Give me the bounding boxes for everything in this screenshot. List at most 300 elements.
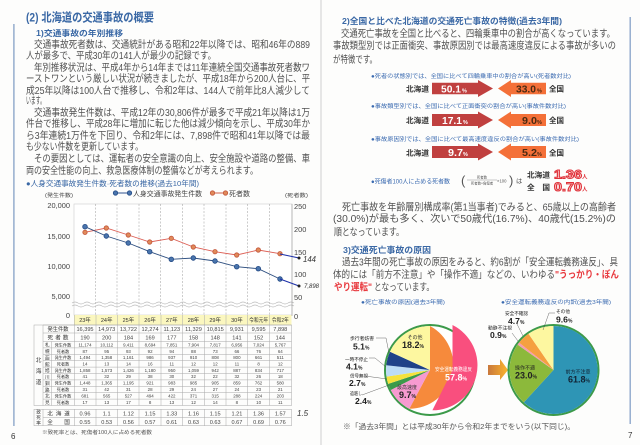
pie chart: causes of fatal accidents bbox=[385, 325, 477, 415]
comparison 3: accident cause: % bbox=[537, 152, 542, 158]
page number 7: 7 bbox=[628, 431, 633, 440]
table values: 14 bbox=[83, 362, 88, 366]
table values: 0.57 bbox=[145, 420, 156, 426]
table values: 0.63 bbox=[210, 420, 221, 426]
row labels: 川 bbox=[45, 374, 50, 380]
row labels: 死者数 bbox=[57, 399, 70, 406]
table values: 184 bbox=[124, 336, 133, 342]
comparison 1: occupants bbox=[371, 72, 571, 97]
comparison 4: fatality rate: ) bbox=[509, 173, 513, 188]
pie labels: breakdown callouts: 0.9% bbox=[490, 330, 507, 340]
table values: 800 bbox=[233, 355, 241, 360]
year header row: 26年 bbox=[144, 316, 156, 324]
row labels: 率 bbox=[36, 420, 41, 426]
text block: causes: 体的には「前方不注意」や「操作不適」などの、いわゆる bbox=[333, 268, 555, 281]
table values: 30 bbox=[169, 374, 175, 379]
table values: 190 bbox=[80, 336, 90, 342]
text block: age composition: (30.0%)が最も多く、次いで50歳代(16.7%)、40歳代(15.2%)の bbox=[333, 212, 616, 225]
pie labels: left side callouts: 2.7% bbox=[349, 378, 366, 388]
handwritten extensions bbox=[280, 254, 319, 290]
table values: 887 bbox=[233, 368, 241, 373]
pie labels: breakdown callouts bbox=[488, 308, 573, 341]
comparison 1: occupants: 33.0 bbox=[516, 84, 536, 96]
table values: 422 bbox=[168, 394, 176, 398]
arrow between pies bbox=[488, 359, 508, 380]
table values: 141 bbox=[232, 336, 242, 342]
row labels: 死者数 bbox=[57, 360, 70, 368]
right axis labels: 50 bbox=[294, 293, 302, 302]
text block: comparison intro bbox=[333, 27, 616, 66]
table values: 1,858 bbox=[80, 368, 91, 373]
pie chart: causes of fatal accidents: 安全運転義務違反 bbox=[435, 365, 472, 373]
text block: left page body: その要因としては、運転者の安全意識の向上、安全施設や道路の整備、車 bbox=[34, 152, 310, 165]
legend: 人身交通事故発生件数 bbox=[133, 189, 202, 198]
left axis labels: 5,000 bbox=[52, 292, 70, 301]
year header row: 27年 bbox=[166, 316, 178, 324]
table values: 11,329 bbox=[185, 327, 202, 333]
table values: 200 bbox=[102, 336, 111, 342]
left axis labels: 0 bbox=[66, 311, 70, 320]
table values: 1.12 bbox=[123, 412, 134, 418]
row labels: 死者数 bbox=[48, 334, 69, 342]
comparison 1: occupants: % bbox=[537, 88, 542, 94]
comparison 3: accident cause bbox=[371, 135, 579, 160]
comparison 4: fatality rate: 人 bbox=[582, 174, 588, 180]
table values: 986 bbox=[146, 355, 154, 360]
pie caption: causes: ●死亡事故の原因(過去3年間) bbox=[361, 298, 445, 306]
table values: 12 bbox=[278, 362, 283, 366]
table values: 14 bbox=[213, 400, 218, 405]
table values: 66 bbox=[234, 349, 240, 354]
pie chart: causes of fatal accidents: 9.7% bbox=[399, 390, 417, 400]
row labels: 海 bbox=[36, 367, 42, 375]
table values: 0.69 bbox=[253, 420, 264, 426]
table values: 11,174 bbox=[78, 342, 92, 348]
comparison 2: accident type: % bbox=[537, 120, 542, 126]
table values: 169 bbox=[145, 336, 155, 342]
row labels: 死者数 bbox=[57, 373, 70, 380]
year header row: 令和2年 bbox=[272, 316, 289, 324]
table values: 18 bbox=[278, 374, 283, 379]
table values: 7,898 bbox=[273, 327, 287, 333]
table values: 10,815 bbox=[207, 327, 224, 333]
comparison 2: accident type: % bbox=[463, 120, 468, 126]
table values: 92 bbox=[148, 349, 153, 354]
pie labels: left side callouts: 2.4% bbox=[355, 396, 372, 406]
table values: 1.16 bbox=[188, 412, 199, 418]
comparison 2: accident type: ●事故類型別では、全国に比べて正面衝突の割合が高い(事故件数対比) bbox=[371, 102, 566, 110]
row labels: 館 bbox=[45, 361, 50, 368]
left axis labels: 15,000 bbox=[47, 232, 70, 241]
table values: 12 bbox=[191, 362, 196, 366]
comparison 4: fatality rate: 死者数+負傷者 bbox=[471, 180, 494, 186]
left axis labels: 20,000 bbox=[47, 201, 70, 210]
axis titles: (死者数) bbox=[285, 192, 308, 199]
table values: 24 bbox=[234, 387, 240, 392]
table values: 950 bbox=[168, 368, 176, 373]
row labels: 札 bbox=[45, 342, 50, 348]
text block: left page body: 交通事故発生件数は、平成12年の30,806件が最多で平成21年以降は1万 bbox=[34, 106, 310, 119]
table values: 494 bbox=[146, 394, 154, 398]
table values: 16 bbox=[148, 362, 153, 366]
text block: left page body: 件台で推移し、平成28年に増加に転じた他は減少傾向を示し、平成30年か bbox=[26, 117, 310, 130]
comparison 4: fatality rate: ●死傷者100人に占める死者数 bbox=[371, 178, 450, 186]
line chart: accidents and deaths bbox=[45, 189, 319, 321]
pie chart: causes of fatal accidents: その他 bbox=[407, 334, 423, 341]
table values: 32 bbox=[191, 374, 196, 379]
comparison 2: accident type: 9.0 bbox=[522, 116, 537, 127]
table values: 14 bbox=[126, 362, 131, 366]
table values: 371 bbox=[190, 394, 198, 398]
text block: left page body: 成25年以降は100人台で推移し、令和2年は、144人で前年比8人減少して bbox=[26, 84, 310, 97]
table values: 681 bbox=[81, 394, 89, 398]
year header row: 30年 bbox=[231, 316, 243, 324]
pie caption: breakdown: ●安全運転義務違反の内訳(過去3年間) bbox=[501, 298, 611, 306]
comparison 1: occupants: 全国 bbox=[549, 84, 564, 94]
table values: 1,448 bbox=[80, 380, 91, 386]
table values: 905 bbox=[212, 380, 219, 386]
handwritten extensions: 7,898 bbox=[304, 283, 319, 290]
table values: 288 bbox=[233, 394, 241, 398]
comparison 2: accident type bbox=[371, 102, 566, 128]
comparison 3: accident cause: % bbox=[463, 152, 468, 158]
row labels: 函 bbox=[45, 356, 50, 362]
comparison 3: accident cause: 全国 bbox=[549, 148, 564, 158]
table values: 0.61 bbox=[166, 420, 177, 426]
table values: 7,904 bbox=[188, 342, 200, 348]
pie labels: breakdown callouts: 4.7% bbox=[508, 316, 525, 326]
table values: 12 bbox=[213, 362, 218, 366]
table values: 0.67 bbox=[231, 420, 242, 426]
table values: 93 bbox=[126, 349, 131, 354]
table values: 32 bbox=[104, 374, 110, 379]
table values: 1.1 bbox=[103, 412, 111, 418]
table values: 152 bbox=[254, 336, 263, 342]
year header row: 28年 bbox=[188, 316, 200, 324]
comparison 4: fatality rate: 人 bbox=[582, 187, 588, 193]
row labels: 北 bbox=[36, 356, 42, 364]
table values: 1,059 bbox=[188, 368, 200, 373]
table values: 16,395 bbox=[76, 327, 94, 333]
pie labels: left side callouts: 歩行者妨害 bbox=[350, 335, 374, 342]
text block: left page body: ーストワンという厳しい状況が続きましたが、平成18年から200人台に、平 bbox=[26, 72, 310, 85]
text block: age composition bbox=[333, 200, 616, 238]
axis titles bbox=[45, 192, 308, 199]
table values: 87 bbox=[83, 349, 88, 354]
table values: 565 bbox=[103, 394, 111, 398]
pie chart: breakdown of safe driving violations: 前方不注意 bbox=[565, 368, 591, 376]
comparison 4: fatality rate: 0.70 bbox=[554, 180, 582, 194]
row labels: 国 bbox=[64, 419, 70, 426]
table values: 7,024 bbox=[253, 342, 265, 348]
text block: causes: やり運転" bbox=[334, 280, 372, 294]
right axis labels: 200 bbox=[294, 225, 306, 234]
comparison 4: fatality rate: は bbox=[516, 178, 522, 186]
chart axes and gridlines bbox=[72, 204, 294, 316]
comparison 4: fatality rate: 北海道 bbox=[527, 170, 551, 180]
comparison 4: fatality rate: 死者数 bbox=[477, 174, 488, 180]
pie labels: breakdown callouts: 9.6% bbox=[556, 314, 573, 324]
table values: 8,694 bbox=[145, 342, 156, 348]
table values: 41 bbox=[83, 374, 88, 379]
table footnote: ※致死率とは、死傷者100人に占める死者数 bbox=[42, 428, 153, 436]
table values: 11 bbox=[170, 362, 175, 366]
table values: 580 bbox=[277, 380, 285, 386]
table values: 1,494 bbox=[80, 355, 91, 360]
pie labels: breakdown callouts: 安全不確認 bbox=[505, 310, 528, 317]
comparison 3: accident cause: 北海道 bbox=[406, 148, 430, 158]
row labels: 旭 bbox=[45, 367, 50, 374]
comparison 4: fatality rate: 1.36 bbox=[554, 168, 582, 182]
table values: 12 bbox=[191, 400, 196, 405]
table values: 315 bbox=[212, 394, 219, 398]
pie labels: left side callouts bbox=[345, 335, 389, 406]
table values: 1.36 bbox=[253, 412, 264, 418]
text block: left page body: 交通事故死者数は、交通統計がある昭和22年以降では、昭和46年の889 bbox=[34, 38, 310, 51]
table values: 7,817 bbox=[210, 342, 221, 348]
row labels: 死者数 bbox=[57, 386, 70, 393]
table values: 17 bbox=[126, 400, 131, 405]
table values: 0.96 bbox=[80, 412, 90, 418]
pie labels: left side callouts: 4.1% bbox=[346, 362, 363, 372]
row labels: 道 bbox=[36, 378, 42, 386]
text block: causes: となっています。 bbox=[374, 282, 434, 294]
pie chart: breakdown of safe driving violations bbox=[508, 325, 598, 415]
table values: 31 bbox=[83, 387, 88, 392]
table values: 1,195 bbox=[123, 380, 134, 386]
table values: 177 bbox=[167, 336, 176, 342]
left axis labels: 10,000 bbox=[47, 262, 70, 271]
row labels: 発生件数 bbox=[48, 325, 69, 333]
year header row: 25年 bbox=[123, 316, 135, 324]
table values: 13 bbox=[104, 400, 110, 405]
table values: 13 bbox=[169, 400, 175, 405]
table values: 38 bbox=[148, 374, 153, 379]
table values: 5,767 bbox=[275, 342, 286, 348]
comparison 2: accident type: 北海道 bbox=[406, 116, 430, 125]
table values: 224 bbox=[255, 394, 263, 398]
table values: 527 bbox=[125, 394, 133, 398]
table values: 1,358 bbox=[101, 355, 113, 360]
table values: 808 bbox=[212, 355, 219, 360]
table values: 1.57 bbox=[275, 412, 286, 418]
table values: 511 bbox=[277, 355, 284, 360]
row labels: 北 bbox=[45, 392, 50, 400]
table values: 73 bbox=[213, 349, 218, 354]
table values: 29 bbox=[169, 387, 175, 392]
pie labels: left side callouts: 5.1% bbox=[353, 342, 370, 352]
table values: 1.21 bbox=[231, 412, 242, 418]
comparison 3: accident cause: 5.2 bbox=[522, 148, 537, 159]
table values: 11,123 bbox=[163, 327, 180, 333]
table values: 937 bbox=[168, 355, 176, 360]
table values: 144 bbox=[276, 336, 285, 342]
pie labels: left side callouts: 追越し bbox=[350, 390, 362, 397]
table values: 985 bbox=[190, 380, 198, 386]
table values: 76 bbox=[256, 349, 262, 354]
comparison 4: fatality rate: 全 国 bbox=[527, 183, 550, 192]
right axis labels: 0 bbox=[294, 312, 298, 321]
row labels: 釧 bbox=[45, 380, 50, 387]
table values: 94 bbox=[169, 349, 175, 354]
table values: 0.56 bbox=[123, 420, 134, 426]
table values: 1.33 bbox=[166, 412, 177, 418]
text block: comparison intro: が特徴です。 bbox=[333, 53, 377, 66]
row labels: 発生件数 bbox=[55, 342, 72, 348]
heading: 1) yearly trend: 1)交通事故の年別推移 bbox=[36, 28, 123, 38]
table values: 11 bbox=[278, 400, 283, 405]
year header row: 29年 bbox=[209, 316, 222, 324]
comparison 1: occupants: ●死者の状態別では、全国に比べて四輪乗車中の割合が高い(死者数対比) bbox=[371, 72, 571, 80]
table values: 1,365 bbox=[101, 380, 113, 386]
page number 6: 6 bbox=[11, 432, 16, 441]
comparison 1: occupants: 北海道 bbox=[406, 84, 430, 94]
table values: 42 bbox=[104, 387, 110, 392]
table values: 95 bbox=[104, 349, 110, 354]
axis titles: (発生件数) bbox=[45, 192, 73, 199]
year header row: 23年 bbox=[79, 316, 91, 324]
comparison 2: accident type: 全国 bbox=[549, 116, 564, 125]
table values: 942 bbox=[212, 368, 219, 373]
pie chart: breakdown of safe driving violations: 23.0% bbox=[515, 370, 538, 380]
row labels: 道 bbox=[64, 410, 70, 418]
year header row bbox=[74, 315, 292, 325]
table values bbox=[76, 327, 287, 426]
table values: 9,411 bbox=[123, 342, 134, 348]
pie labels: left side callouts: 一時不停止 bbox=[345, 356, 368, 363]
text block: causes bbox=[333, 256, 619, 294]
pie chart: causes of fatal accidents: 最高速度 bbox=[397, 384, 417, 391]
comparison 3: accident cause: 9.7 bbox=[448, 148, 463, 159]
series: accidents (blue) bbox=[83, 224, 282, 281]
table values: 1,573 bbox=[101, 368, 113, 373]
table values: 0.63 bbox=[188, 420, 199, 426]
row labels: 幌 bbox=[45, 348, 50, 355]
comparison 1: occupants: % bbox=[462, 88, 467, 94]
pie labels: breakdown callouts: 動静不注視 bbox=[488, 324, 512, 332]
table values: 1,180 bbox=[145, 368, 156, 373]
table values: 26 bbox=[256, 374, 262, 379]
table values: 0.55 bbox=[80, 420, 90, 426]
text block: left page body bbox=[26, 38, 310, 177]
heading: 3) causes: 3)交通死亡事故の原因 bbox=[343, 244, 431, 255]
footnote: ※「過去3年間」とは平成30年から令和2年までをいう(以下同じ)。 bbox=[343, 422, 575, 431]
table values: 23 bbox=[256, 387, 262, 392]
text block: left page body: ら3年連続1万件を下回り、令和2年には、7,898件で昭和41年以降では最 bbox=[26, 129, 310, 142]
text block: left page body: います。 bbox=[26, 95, 45, 107]
text block: left page body: 人が最多で、平成30年の141人が最少の記録です。 bbox=[26, 49, 216, 62]
table values: 11 bbox=[235, 362, 240, 366]
table values: 1,161 bbox=[123, 355, 134, 360]
table values: 983 bbox=[168, 380, 176, 386]
row labels: 発生件数 bbox=[55, 392, 72, 400]
comparison 4: fatality rate bbox=[371, 168, 588, 194]
pie labels: breakdown callouts: その他 bbox=[556, 308, 570, 315]
row labels: 発生件数 bbox=[55, 380, 72, 386]
table values: 31 bbox=[126, 387, 131, 392]
table grid bbox=[34, 315, 292, 426]
heading: section 2 title: (2) 北海道の交通事故の概要 bbox=[26, 10, 154, 24]
table values: 0.76 bbox=[275, 420, 286, 426]
table values: 17 bbox=[83, 400, 88, 405]
table values: 24 bbox=[191, 387, 196, 392]
table values: 22 bbox=[213, 374, 218, 379]
table values: 717 bbox=[277, 368, 285, 373]
table values: 32 bbox=[234, 374, 240, 379]
table values: 88 bbox=[191, 349, 196, 354]
right axis labels: 150 bbox=[294, 248, 306, 257]
comparison 4: fatality rate: ×100 bbox=[497, 178, 507, 184]
text block: age composition: 死亡事故を年齢層別構成率(第1当事者)でみると、65歳以上の高齢者 bbox=[342, 200, 616, 214]
comparison 3: accident cause: ●事故原因別では、全国に比べて最高速度違反の割合が高い(事故件数対比) bbox=[371, 135, 579, 143]
pie chart: breakdown of safe driving violations: 操作不適 bbox=[515, 364, 535, 372]
row labels: 路 bbox=[45, 386, 50, 394]
legend: 死者数 bbox=[229, 189, 250, 198]
table values: 0.53 bbox=[101, 420, 112, 426]
row labels: 死者数 bbox=[57, 348, 70, 355]
text block: left page body: 年別推移状況は、平成4年から14年までは11年連続全国交通事故死者数ワ bbox=[34, 61, 310, 74]
text block: causes: "うっかり・ぼん bbox=[555, 268, 619, 281]
left axis labels bbox=[47, 201, 70, 320]
table values: 13 bbox=[104, 362, 110, 366]
table values: 21 bbox=[278, 387, 283, 392]
heading: 2) comparison: 2)全国と比べた北海道の交通死亡事故の特徴(過去3年間) bbox=[342, 15, 562, 26]
row labels: 死 bbox=[36, 415, 41, 421]
table values: 27 bbox=[213, 387, 218, 392]
row labels: 北 bbox=[47, 410, 53, 418]
handwritten extensions: 144 bbox=[303, 255, 317, 264]
table values: 1.15 bbox=[210, 412, 221, 418]
table values: 8 bbox=[257, 362, 260, 366]
chart caption: ●人身交通事故発生件数·死者数の推移(過去10年間) bbox=[26, 178, 199, 188]
pie labels: left side callouts: 信号無視 bbox=[350, 372, 368, 380]
table values: 10 bbox=[256, 400, 262, 405]
row labels: 発生件数 bbox=[55, 354, 72, 361]
year header row: 24年 bbox=[101, 316, 113, 324]
table values: 29 bbox=[126, 374, 131, 379]
table values: 6,956 bbox=[231, 342, 243, 348]
table values: 9,931 bbox=[230, 327, 244, 333]
table values: 64 bbox=[278, 349, 283, 354]
text block: left page body: 両の安全性能の向上、救急医療体制の整備などが考えられます。 bbox=[26, 164, 258, 177]
table values: 13,722 bbox=[120, 327, 137, 333]
table values: 661 bbox=[255, 355, 263, 360]
table values: 9,595 bbox=[252, 327, 266, 333]
row labels: 見 bbox=[45, 400, 50, 406]
table values: 8 bbox=[149, 400, 152, 405]
pie chart: causes of fatal accidents: 57.8% bbox=[445, 372, 468, 382]
table values: 7,851 bbox=[166, 342, 178, 348]
row labels: 海 bbox=[56, 410, 62, 418]
row labels: 発生件数 bbox=[55, 367, 72, 374]
text block: age composition: 順となっています。 bbox=[334, 226, 404, 238]
handwritten note: 1.5: 1.5 bbox=[297, 409, 309, 418]
row labels: 全 bbox=[47, 418, 53, 426]
text block: left page body: も少ない件数を更新しています。 bbox=[26, 140, 143, 153]
row labels: 致 bbox=[36, 408, 41, 416]
row labels bbox=[36, 325, 72, 426]
table values: 921 bbox=[146, 380, 154, 386]
table values: 158 bbox=[189, 336, 198, 342]
table values: 12,274 bbox=[142, 327, 159, 333]
table values: 148 bbox=[211, 336, 220, 342]
pie chart: causes of fatal accidents: 18.2% bbox=[402, 340, 425, 350]
table values: 1.15 bbox=[145, 412, 156, 418]
right axis labels bbox=[294, 202, 306, 321]
table values: 203 bbox=[277, 394, 285, 398]
table values: 10,112 bbox=[100, 342, 114, 348]
table values: 859 bbox=[233, 380, 241, 386]
